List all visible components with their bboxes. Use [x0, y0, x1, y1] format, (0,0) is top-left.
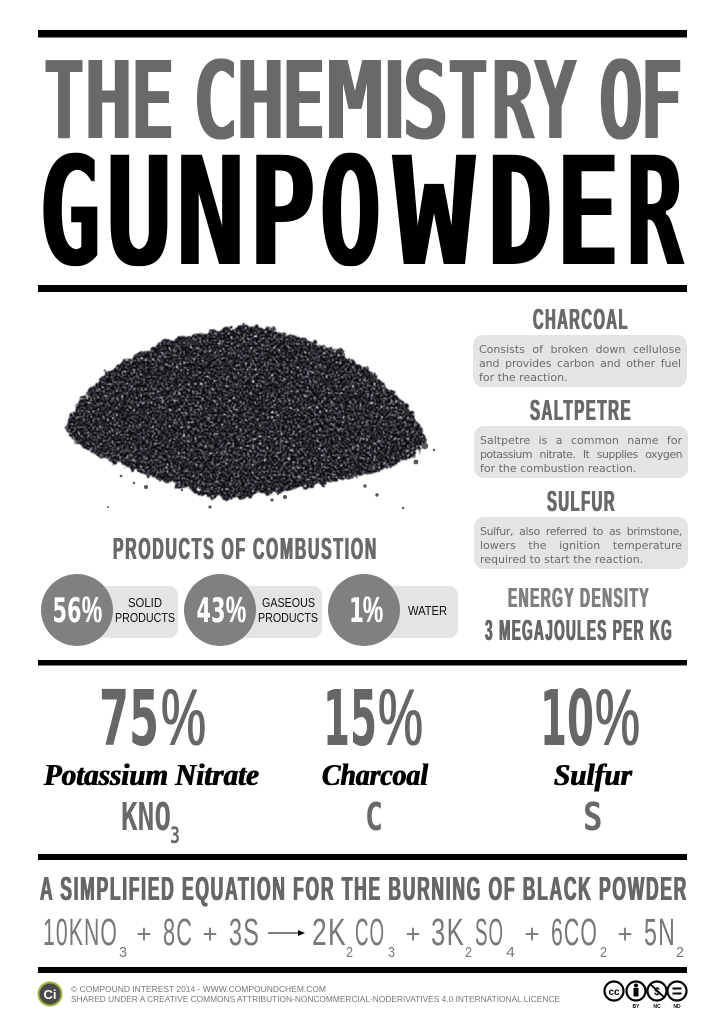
composition: potassium nitrate: % — [161, 673, 206, 763]
title: gunpowder: R — [626, 124, 684, 302]
chemical equation: 8C — [163, 912, 193, 954]
title: gunpowder: G — [39, 124, 101, 302]
logo: compound interest — [38, 982, 62, 1006]
chemical equation: 10KNO — [43, 912, 118, 954]
chemical equation: CO — [355, 912, 385, 954]
panel: sulfur description: lowers the ignition temperature — [480, 539, 682, 552]
composition: charcoal: 15 — [323, 675, 377, 764]
licence icons: cc — [608, 987, 620, 998]
title: gunpowder: E — [556, 124, 620, 302]
title: gunpowder — [39, 124, 684, 302]
rule above composition — [38, 660, 687, 666]
composition: charcoal — [322, 673, 428, 839]
stat: 56% solid products: % — [82, 589, 102, 630]
composition: charcoal: % — [378, 673, 423, 763]
composition: potassium nitrate — [43, 673, 259, 849]
chemical equation: 2K — [312, 912, 347, 954]
chemical equation: 4 — [506, 944, 515, 961]
panel: saltpetre description — [474, 426, 688, 478]
stat: 56% solid products: PRODUCTS — [115, 611, 175, 625]
stat: 43% gaseous products: PRODUCTS — [258, 611, 318, 625]
stat: 43% gaseous products: GASEOUS — [262, 596, 315, 610]
arrow — [268, 930, 305, 936]
stat: 43% gaseous products: 43 — [196, 591, 226, 631]
chemical equation: 3 — [119, 944, 127, 961]
title: the chemistry of: R — [491, 37, 535, 165]
title: the chemistry of: T — [448, 37, 488, 165]
chemical equation: 2 — [600, 944, 607, 961]
chemical equation: 2 — [676, 944, 684, 961]
chemical equation: + — [202, 919, 218, 949]
bottom rule — [38, 967, 687, 973]
title: gunpowder: W — [393, 124, 475, 302]
title: gunpowder: O — [320, 124, 382, 302]
panel: charcoal description: Consists of broken down cellulose — [479, 343, 681, 356]
footer credits: SHARED UNDER A CREATIVE COMMONS ATTRIBUTION-NONCOMMERCIAL-NODERIVATIVES 4.0 INTERNATIONAL LICENCE — [71, 995, 560, 1004]
licence icons: $ — [654, 986, 660, 998]
title: the chemistry of: C — [192, 37, 239, 165]
footer credits: © COMPOUND INTEREST 2014 - WWW.COMPOUNDCHEM.COM — [71, 985, 326, 994]
chemical equation: 2 — [346, 944, 353, 961]
composition: potassium nitrate: 3 — [170, 824, 180, 849]
title: gunpowder: D — [487, 124, 553, 302]
composition: sulfur: 10 — [540, 675, 594, 764]
composition: potassium nitrate: KNO — [121, 795, 171, 839]
composition: sulfur: Sulfur — [554, 757, 633, 792]
chemical equation: 3 — [388, 944, 395, 961]
licence icons — [604, 982, 686, 1010]
image: gunpowder pile — [66, 325, 435, 509]
chemical equation: + — [524, 919, 540, 949]
chemical equation: 2 — [465, 944, 472, 961]
footer credits — [71, 985, 560, 1004]
panel: saltpetre description: for the combustion reaction. — [480, 462, 636, 475]
composition: sulfur — [540, 673, 640, 839]
heading: products of combustion: PRODUCTS OF COMBUSTION — [113, 531, 378, 566]
title: the chemistry of: H — [236, 37, 285, 165]
panel: charcoal description: and provides carbon and other fuel — [479, 357, 681, 370]
chemical equation: + — [618, 919, 632, 949]
stat: 43% gaseous products — [184, 574, 322, 646]
title: gunpowder: N — [176, 124, 245, 302]
top rule — [38, 30, 687, 38]
composition: sulfur: % — [595, 673, 640, 763]
chemical equation: 5N — [644, 912, 676, 954]
stat: 1% water — [328, 574, 458, 646]
title: the chemistry of: F — [640, 37, 684, 165]
stat: 1% water: 1 — [349, 591, 364, 631]
title: the chemistry of: Y — [534, 37, 577, 165]
rule above equation — [38, 854, 687, 860]
licence icons: NC — [653, 1004, 661, 1010]
heading: charcoal: CHARCOAL — [533, 304, 629, 336]
panel: charcoal description: for the reaction. — [479, 371, 568, 384]
composition: potassium nitrate: 75 — [99, 675, 159, 764]
title: gunpowder: U — [106, 124, 172, 302]
panel: saltpetre description: Saltpetre is a common name for — [480, 434, 682, 447]
chemical equation: 3K — [431, 912, 465, 954]
title: the chemistry of: S — [402, 37, 449, 165]
stat: 56% solid products — [41, 574, 178, 646]
stat: 43% gaseous products: % — [226, 589, 246, 630]
chemical equation: SO — [475, 912, 504, 954]
title: the chemistry of: H — [84, 37, 133, 165]
chemical equation: 3S — [229, 912, 260, 954]
rule under title — [38, 285, 687, 292]
composition: sulfur: S — [583, 795, 602, 839]
panel: charcoal description — [473, 335, 687, 387]
composition: potassium nitrate: Potassium Nitrate — [43, 757, 259, 792]
panel: sulfur description: Sulfur, also referred to as brimstone, — [480, 525, 682, 538]
licence icons: ND — [673, 1004, 681, 1010]
chemical equation: + — [406, 919, 420, 949]
composition: charcoal: C — [365, 795, 383, 839]
stat: 56% solid products: SOLID — [128, 596, 162, 610]
stat: 1% water: % — [363, 589, 383, 630]
title: the chemistry of: M — [326, 37, 384, 165]
panel: sulfur description — [474, 517, 688, 569]
chemical equation — [43, 912, 684, 961]
title: the chemistry of: I — [384, 34, 406, 164]
logo: compound interest: Ci — [44, 987, 56, 1002]
title: the chemistry of: E — [130, 37, 175, 165]
heading: saltpetre: SALTPETRE — [530, 395, 632, 427]
chemical equation: 6CO — [551, 912, 598, 954]
composition: charcoal: Charcoal — [322, 757, 428, 792]
title: the chemistry of: T — [44, 37, 84, 165]
title: the chemistry of — [44, 34, 684, 165]
chemical equation: + — [136, 919, 152, 949]
panel: saltpetre description: potassium nitrate. It supplies oxygen — [480, 448, 682, 461]
title: the chemistry of: E — [282, 37, 326, 165]
title: the chemistry of: O — [598, 37, 643, 165]
stat: 1% water: WATER — [408, 604, 447, 618]
panel: sulfur description: required to start the reaction. — [480, 553, 643, 566]
title: gunpowder: P — [249, 124, 316, 302]
licence icons: BY — [633, 1004, 640, 1010]
heading: sulfur: SULFUR — [547, 486, 616, 518]
stat: 56% solid products: 56 — [52, 591, 82, 631]
